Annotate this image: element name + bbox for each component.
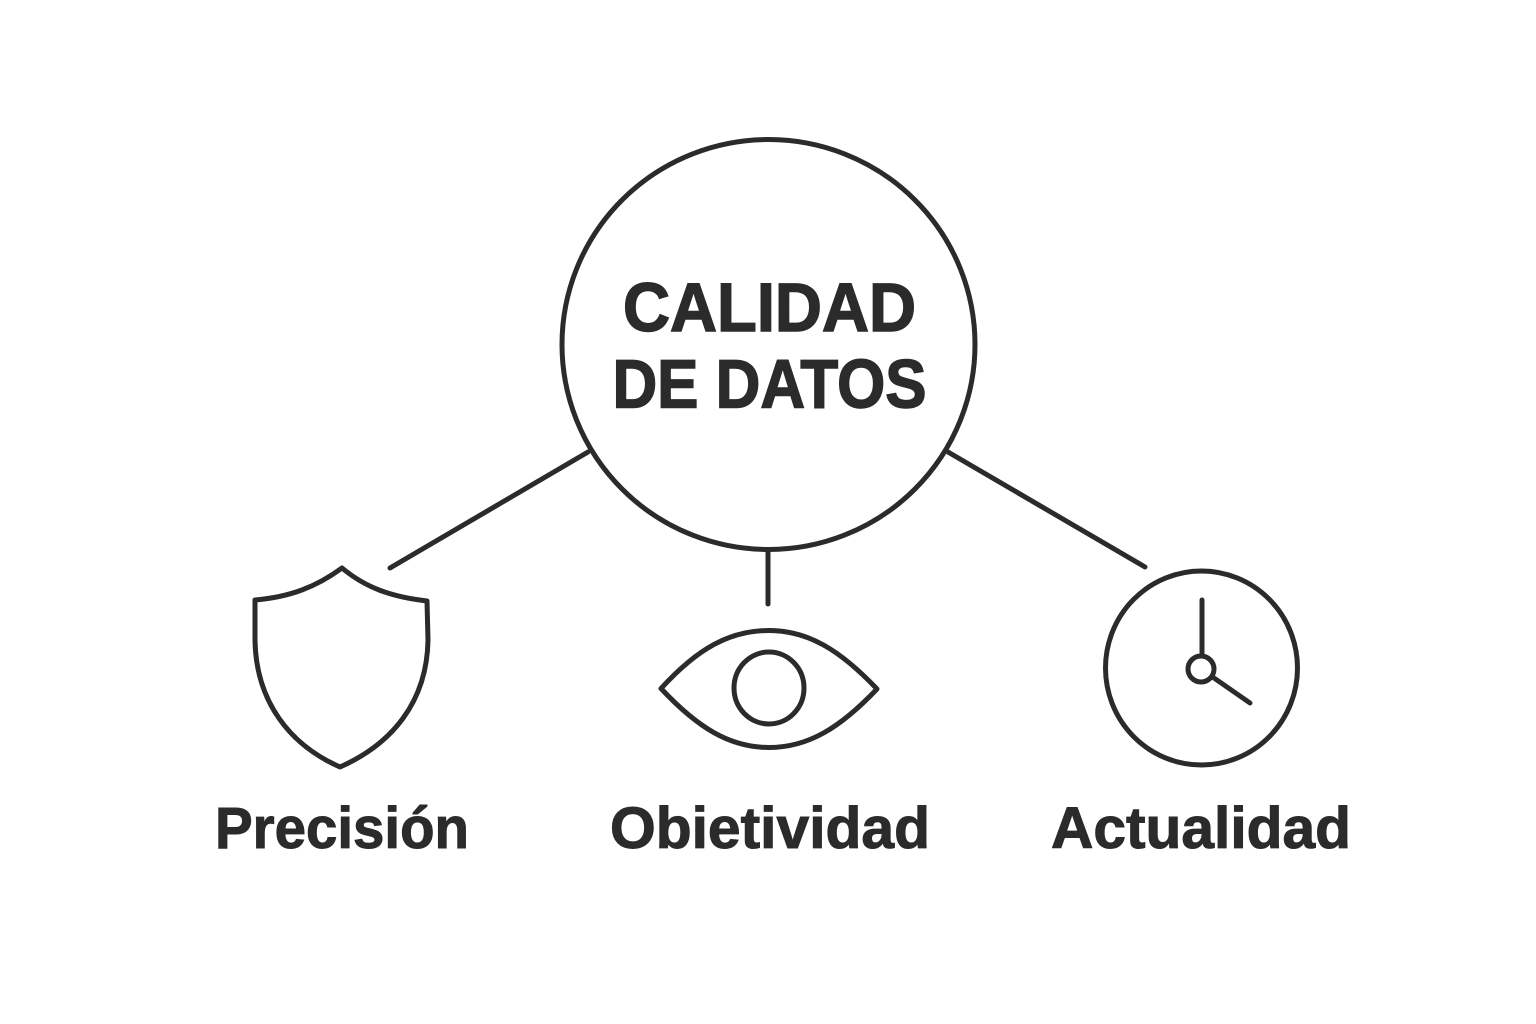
title: calidad de datos: DE DATOS [612,346,926,422]
title: calidad de datos [612,269,926,422]
label: precision: Precisión [215,796,469,861]
label: objetividad: Obietividad [610,796,930,861]
icon: shield [255,568,428,767]
icon: clock [1106,571,1298,765]
connector: to precision [390,452,588,568]
connector: to actualidad [948,452,1145,567]
central circle [562,140,975,550]
label: actualidad: Actualidad [1051,796,1351,861]
connector: to objetividad [766,552,770,604]
title: calidad de datos: CALIDAD [623,269,916,346]
icon: eye [661,630,877,748]
